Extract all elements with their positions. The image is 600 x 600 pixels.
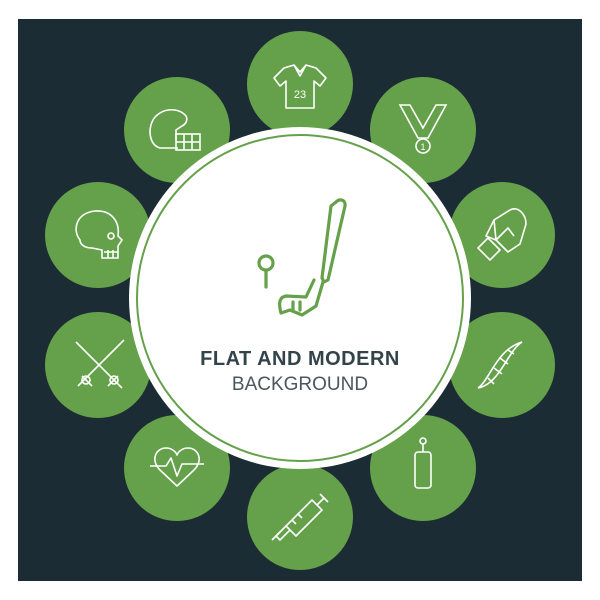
icon: punching bag bbox=[370, 415, 476, 521]
subtitle: BACKGROUND bbox=[232, 374, 368, 395]
icon: golf club and tee bbox=[259, 200, 345, 315]
title: FLAT AND MODERN bbox=[200, 348, 400, 370]
icon: heart rate bbox=[124, 415, 230, 521]
icon: jersey bbox=[247, 31, 353, 137]
icon: helmet bbox=[124, 77, 230, 183]
icon: medal: 1 bbox=[420, 142, 426, 152]
icon: fencing bbox=[45, 312, 151, 418]
icon: skull bbox=[45, 182, 151, 288]
icon: medal bbox=[370, 77, 476, 183]
icon: jersey: 23 bbox=[294, 89, 306, 101]
icon: boxing glove bbox=[449, 182, 555, 288]
center circle bbox=[129, 127, 471, 469]
icon: syringe bbox=[247, 464, 353, 570]
icon: dna bbox=[449, 312, 555, 418]
